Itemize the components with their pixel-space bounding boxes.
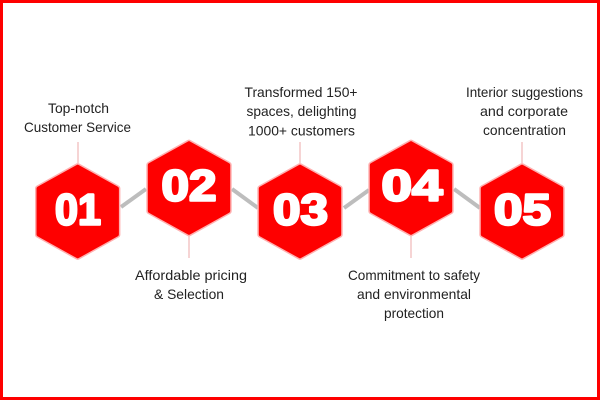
label 03: 1000+ customers [248, 124, 355, 138]
step 05: 05 [494, 186, 551, 234]
leader lines from hexagons to labels [78, 142, 522, 258]
label 01: Customer Service [24, 120, 131, 135]
step 04 [348, 143, 480, 321]
step 05 [466, 85, 583, 256]
label 03 [244, 85, 358, 138]
step 01: 01 [55, 186, 101, 234]
label 01 [24, 101, 131, 135]
label 03: Transformed 150+ [244, 85, 358, 100]
label 03: spaces, delighting [246, 104, 356, 119]
label 02: Affordable pricing [135, 268, 247, 283]
step 03 [244, 85, 358, 256]
label 04: protection [384, 306, 444, 321]
label 05: Interior suggestions [466, 85, 583, 100]
step 01 [24, 101, 131, 256]
label 05: and corporate [480, 104, 568, 119]
step 02: 02 [162, 162, 216, 210]
step 02 [135, 143, 247, 302]
step 04: 04 [382, 162, 443, 210]
connector lines between hexagons [121, 189, 480, 208]
step 03: 03 [273, 186, 328, 234]
label 02: & Selection [154, 287, 224, 302]
label 05: concentration [483, 123, 566, 138]
label 04: Commitment to safety [348, 268, 480, 283]
label 02 [135, 268, 247, 302]
label 05 [466, 85, 583, 138]
label 04 [348, 268, 480, 321]
label 04: and environmental [357, 287, 471, 302]
label 01: Top-notch [48, 101, 109, 116]
